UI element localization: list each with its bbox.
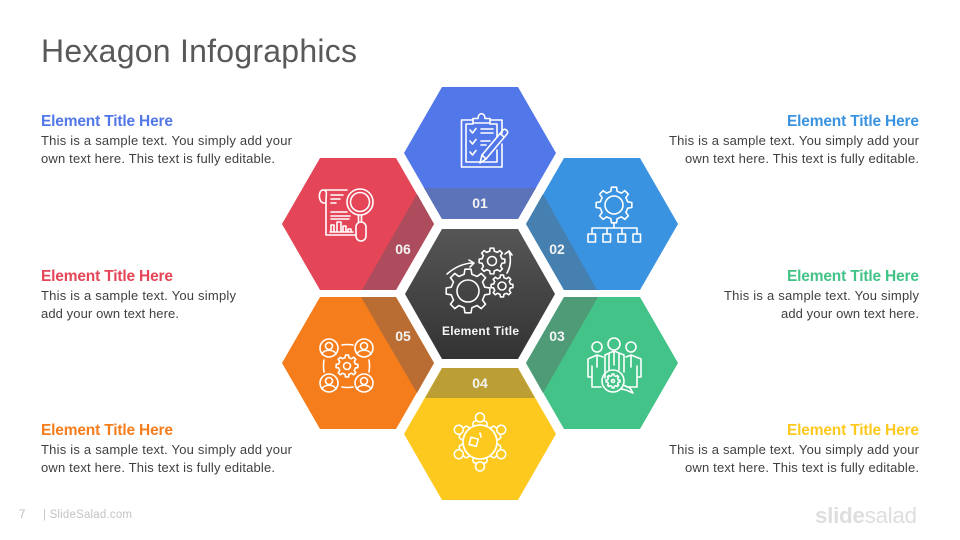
text block: top left [41,113,293,166]
number 04: 04 [472,375,488,391]
text block: middle left: Element Title Here [41,268,173,285]
text block: bottom right: own text here. This text is fully editable. [685,460,919,475]
hexagon 04: yellow [404,368,556,500]
text block: top left: Element Title Here [41,113,173,130]
number 05: 05 [395,328,411,344]
icon: gear hierarchy [588,187,640,242]
title: Hexagon Infographics [41,33,357,69]
text block: top left: own text here. This text is fully editable. [41,151,275,166]
icon: people around gear [320,339,373,392]
text block: bottom right: This is a sample text. You simply add your [669,442,920,457]
hexagon 03: green [526,297,678,429]
text block: bottom right: Element Title Here [787,422,919,439]
number 06: 06 [395,241,411,257]
hexagon 01: blue [404,87,556,219]
icon: clipboard checklist [462,114,508,167]
text block: middle right: Element Title Here [787,268,919,285]
icon: round table meeting [451,413,509,471]
text block: middle right: This is a sample text. You simply [724,288,920,303]
number 03: 03 [549,328,565,344]
number 02: 02 [549,241,565,257]
text block: middle left: add your own text here. [41,306,179,321]
text block: top right: own text here. This text is fully editable. [685,151,919,166]
text block: top left: This is a sample text. You simply add your [41,133,293,148]
icon: gears with arrows [446,248,513,313]
icon: report with magnifier [319,189,373,241]
text block: bottom left: own text here. This text is fully editable. [41,460,275,475]
hexagon 05: orange [282,297,434,429]
footer credit: | SlideSalad.com [43,509,132,521]
logo: slidesalad [815,503,917,528]
text block: bottom left: Element Title Here [41,422,173,439]
text block: top right: Element Title Here [787,113,919,130]
text block: bottom left: This is a sample text. You simply add your [41,442,293,457]
number 01: 01 [472,195,488,211]
text block: middle left [41,268,236,321]
page number: 7 [19,509,25,521]
text block: top right: This is a sample text. You simply add your [669,133,920,148]
text block: top right [669,113,920,166]
center label: Element Title [442,324,519,338]
hexagon 02: sky blue [526,158,678,290]
text block: bottom left [41,422,293,475]
center hexagon [405,229,555,359]
hexagon 06: red [282,158,434,290]
text block: bottom right [669,422,920,475]
text block: middle left: This is a sample text. You simply [41,288,236,303]
text block: middle right: add your own text here. [781,306,919,321]
text block: middle right [724,268,920,321]
icon: team with magnifier [588,338,641,393]
